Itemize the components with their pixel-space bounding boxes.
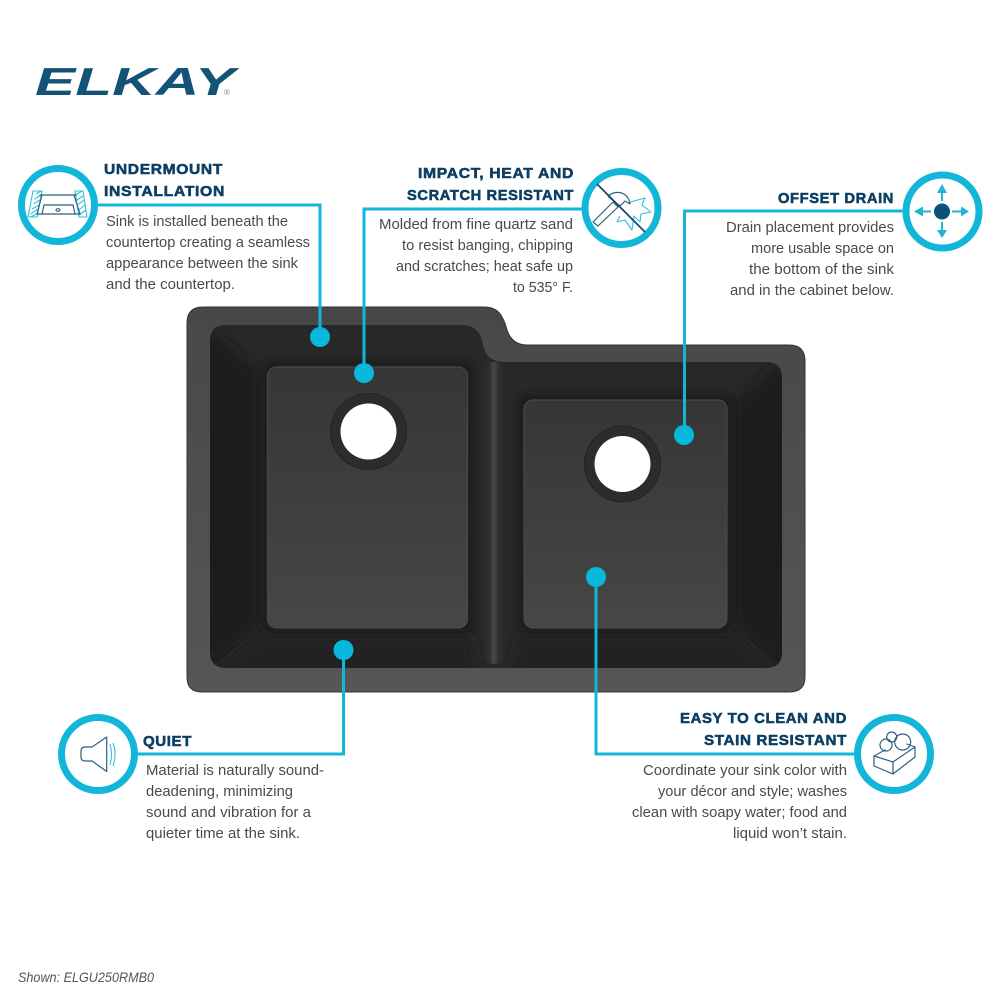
marker dot [354,363,374,383]
heading: IMPACT, HEAT AND [418,166,574,182]
body text: your décor and style; washes [658,784,847,800]
heading: EASY TO CLEAN AND [680,711,847,727]
connector line [596,577,857,754]
callout: quiet [62,640,354,842]
right drain [584,426,660,502]
body text: and the countertop. [106,277,235,293]
body text: Material is naturally sound- [146,763,324,779]
connector line [95,205,320,337]
body text: and in the cabinet below. [730,283,894,299]
body text: deadening, minimizing [146,784,293,800]
connector line [135,650,344,754]
right basin floor [524,400,727,628]
body text: sound and vibration for a [146,805,312,821]
body text: Molded from fine quartz sand [379,217,573,233]
model caption: Shown: ELGU250RMB0 [18,969,154,985]
center divider [482,362,506,664]
body text: Drain placement provides [726,220,894,236]
body text [379,217,573,296]
heading: UNDERMOUNT [104,162,223,178]
icon: undermount sink [22,168,94,242]
callout: easy to clean and stain resistant [586,567,930,842]
heading: OFFSET DRAIN [778,191,894,207]
connector line [364,209,585,373]
left drain [330,394,406,470]
body text: to 535° F. [513,280,573,296]
body text [726,220,895,299]
heading [680,711,847,749]
body text [632,763,847,842]
marker dot [586,567,606,587]
basin walls [195,320,795,680]
body text: countertop creating a seamless [106,235,310,251]
connector line [684,211,906,435]
marker dot [310,327,330,347]
body text [146,763,324,842]
marker dot [334,640,354,660]
body text: liquid won’t stain. [733,826,847,842]
heading [407,166,574,204]
body text: clean with soapy water; food and [632,805,847,821]
body text: the bottom of the sink [749,262,895,278]
logo: Elkay: ELKAY [35,61,240,104]
heading: QUIET [143,734,192,750]
body text: Sink is installed beneath the [106,214,288,230]
logo: Elkay [35,61,240,104]
sink rim [187,307,805,692]
logo: Elkay: ® [224,88,230,97]
marker dot [674,425,694,445]
body text: more usable space on [751,241,894,257]
callout: impact, heat and scratch resistant [354,166,658,383]
icon: hammer crossed out [585,172,658,244]
heading: INSTALLATION [104,184,225,200]
body text [106,214,310,293]
heading: SCRATCH RESISTANT [407,188,574,204]
heading [104,162,225,200]
heading: STAIN RESISTANT [704,733,847,749]
icon: speaker [62,718,134,790]
callout: offset drain [674,175,979,445]
sink illustration [187,307,805,692]
body text: and scratches; heat safe up [396,259,573,275]
icon: soap bar with bubbles [858,718,930,790]
body text: appearance between the sink [106,256,299,272]
body text: quieter time at the sink. [146,826,300,842]
icon: drain with arrows [906,175,979,248]
body text: to resist banging, chipping [402,238,573,254]
left basin floor [268,367,468,628]
body text: Coordinate your sink color with [643,763,847,779]
callout: undermount installation [22,162,330,347]
